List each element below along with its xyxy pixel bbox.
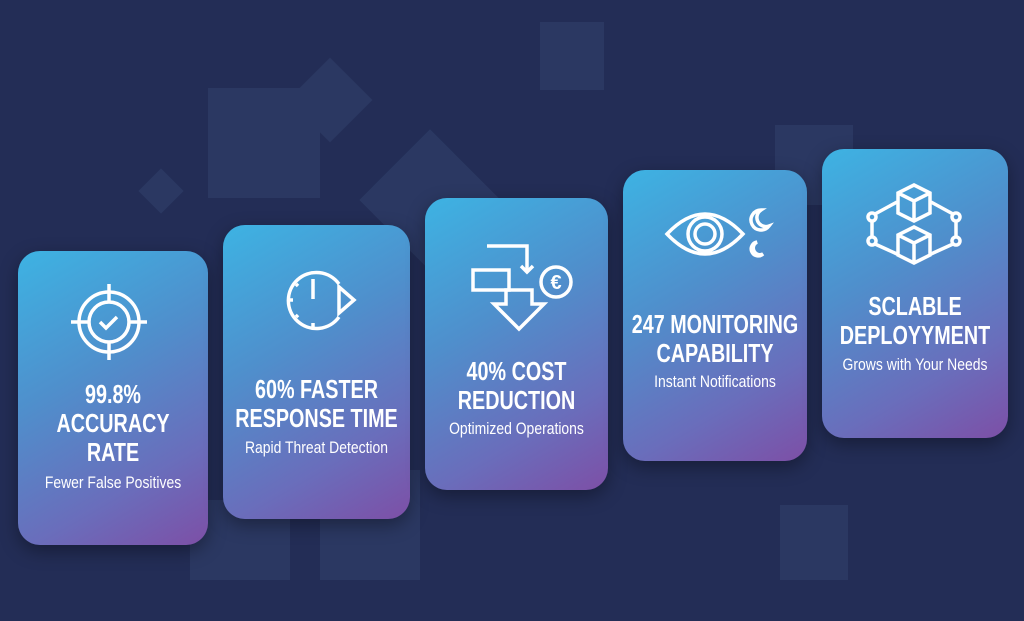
card: scalable [822,149,1008,438]
card: accuracy [18,251,208,545]
title: 99.8% [85,379,141,409]
subtitle: Optimized Operations [449,419,584,438]
title: REDUCTION [458,385,575,415]
title: 247 MONITORING [632,309,798,339]
subtitle: Instant Notifications [654,372,776,391]
title: 60% FASTER [255,374,378,404]
card: monitoring [623,170,807,461]
title: 40% COST [467,356,566,386]
subtitle: Rapid Threat Detection [245,438,388,457]
icon: target [71,284,147,360]
title: ACCURACY [56,408,170,438]
icon: cubes network [866,183,962,265]
title: SCLABLE [868,291,962,321]
subtitle: Grows with Your Needs [843,355,987,374]
subtitle: Fewer False Positives [45,473,181,492]
title [840,291,990,350]
title [56,379,170,467]
icon: clock [286,270,356,330]
icon: cost arrows and euro [471,244,573,332]
card: response [223,225,410,519]
icon: eye and moons [664,208,774,258]
card: cost [425,198,608,490]
title: RESPONSE TIME [235,403,398,433]
title: DEPLOYYMENT [840,320,990,350]
title: RATE [87,437,139,467]
title [235,374,398,433]
title [458,356,575,415]
title [632,309,798,368]
icon: cost arrows and euro: € [550,272,562,294]
title: CAPABILITY [656,338,774,368]
